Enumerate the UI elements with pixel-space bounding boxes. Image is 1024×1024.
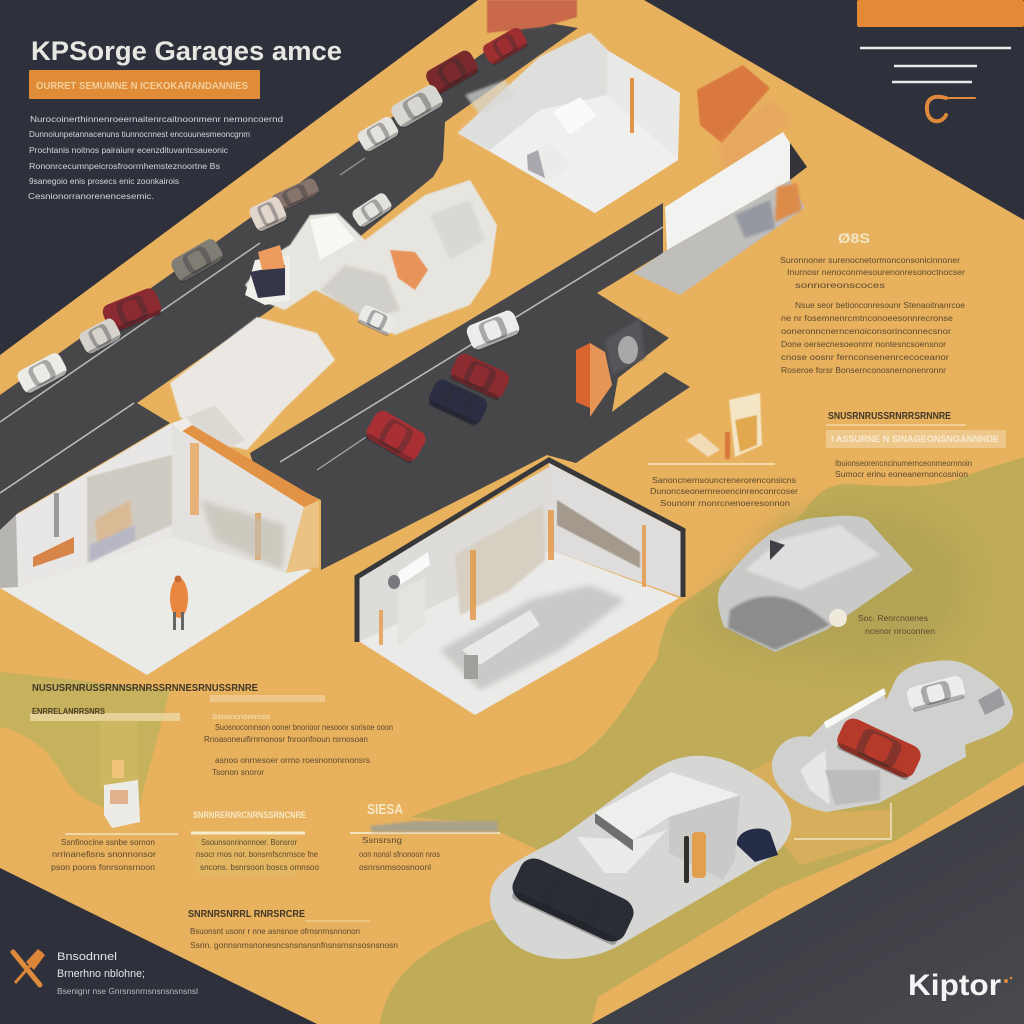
black car [507,853,638,948]
person and pillar [684,832,706,883]
section heading and highlight bar: Ibuionseorencncinumernceonmeornnoin [835,459,972,468]
column 2 heading and text: SNRNRERNRCNRNSSRNCNRE [193,810,306,820]
cars: upper road [15,26,530,396]
column 1 text: nrrinanefisns snonnonsor [52,850,156,859]
garage room: top [458,33,680,213]
intro text block: Cesnionorranorenencesemic. [28,192,154,201]
center-left text lines: asnoo onrnesoer orrno roesnononrnonsrs [215,756,370,765]
section heading and highlight bar: I ASSURNE N SINAGEONSNGANNNDE [831,434,999,444]
right text block: ne nr fosemnenrcmtnconoeesonnrecronse [781,314,954,323]
column 2 heading and text: sncons. bsnrsoon boscs omnsoo [200,863,320,872]
grey garage blob: black car [490,756,791,959]
section heading and highlight bar: Sumocr erinu eoneanernoncosnion [835,470,968,479]
top-right white lines [860,48,1011,82]
intro text block: Prochtanis noitnos pairaiunr ecenzdituvantcsaueonic [29,146,228,155]
grey machine blob right [718,516,913,652]
footer text: Brnerhno nblohne; [57,968,145,980]
left column: section heading: ENRRELANRRSNRS [32,707,106,716]
right text block: Suronnoner surenocnetormonconsonicinnoner [780,256,960,265]
middle text block: Sanoncnernsouncrenerorenconsicns [652,476,796,485]
white car [905,674,967,713]
small caption under machine: ncenor nroconnen [865,627,935,636]
intro text block: Nurocoinerthinnenroeernaitenrcaitnoonmenr nemoncoernd [30,115,283,124]
middle text block: Dunoncseonernreoencinrenconrcoser [650,487,798,496]
intro text block: Dunnoiunpetannacenuns tiunnocnnest encouunesmeoncgnm [29,130,250,139]
bottom section text: Ssrin. gonnsnmsnonesncsnsnsnsnfnsnsrnsnsosnsnosn [190,941,398,950]
orange subtitle banner: OURRET SEMUMNE N ICEKOKARANDANNIES [36,81,248,92]
worker figure [170,576,188,630]
column 1 text [51,834,178,872]
road: upper road [0,20,578,530]
column 2 heading and text: Ssounsonrinonnoer. Bonsror [201,838,297,847]
column 3 heading and text: oon nonsl sfnonoon nros [359,850,440,859]
intro text block: 9sanegoio enis prosecs enic zoonkairois [29,177,179,186]
center-left text lines [204,714,393,777]
center-left text lines: Tsonon snoror [212,768,264,777]
right text block: Roseroe forsr Bonsernconosnernonenronnr [781,366,946,375]
section heading and highlight bar [826,411,1006,479]
background: olive region left [0,672,170,810]
top-right orange bar [857,0,1024,27]
bottom section text: SNRNRSNRRL RNRSRCRE [188,909,305,920]
left column: section heading: NUSUSRNRUSSRNNSRNRSSRNNESRNUSSRNRE [32,683,258,694]
right text block: Ø8S [838,230,870,246]
connector line [794,803,891,839]
title: KPSorge Garages amce [31,36,342,66]
right text block [780,230,966,375]
column 2 heading and text [191,810,320,876]
left column: section heading [30,683,325,721]
grey garage blob: red car [772,660,1013,812]
right text block: Inurnosr nenoconmesourenonresonoctnocser [787,268,965,277]
background: olive region right [380,457,1024,1024]
column 2 heading and text: nsocr rnos nor. bonsrnfscnrnsce fne [196,850,319,859]
section heading and highlight bar: SNUSRNRUSSRNRRSRNNRE [828,411,951,422]
orange sign post in parking [576,318,645,417]
kiosk figure [686,393,762,459]
small caption under machine [858,614,935,636]
small caption under machine: Soc. Renrcnoenes [858,614,928,623]
white lot lower left [170,317,335,450]
column 3 heading and text: SIESA [367,801,403,818]
center-left text lines: Suosnocomnson ooner bnorioor nesoonr sorisoe ooon [215,723,393,732]
logo: Kiptor: Kiptor [908,969,1001,1002]
footer text: Bnsodnnel [57,951,117,963]
bottom section text [188,909,398,950]
orange subtitle banner [29,70,260,99]
road: lower road and parking area [250,203,690,570]
red car [833,715,924,782]
right text block: sonnoreonscoces [795,281,885,290]
column 1 text: Ssnfinocine ssnbe sornon [61,838,155,847]
middle text block [648,464,798,508]
cars: lower road [363,308,522,465]
orange blocks near top [487,0,790,175]
central white building cluster [245,180,497,335]
center-left text lines: Ssnoncnornrcos [212,714,271,721]
right text block: ooneronncnerncenoiconsorinconnecsnor [781,327,951,336]
right text block: Nsue seor betionconresounr Stenaoitnanrcoe [795,301,966,310]
intro text block: Rononrcecumnpeicrosfroorrnhemsteznoortne Bs [29,162,220,171]
footer text: Bsenignr nse Gnrsnsnrnsnsnsnsnsnsl [57,987,198,996]
center-left text lines: Rnoasoneuifirnrnonosr fnroonfnoun rsrnosoan [204,735,368,744]
column 3 heading and text: osnrsnmsoosnoonl [359,863,431,872]
footer text [57,951,198,996]
icon: orange hook [927,97,975,121]
column 3 heading and text: Ssnsrsng [362,836,402,845]
billboard: white panel [633,132,807,295]
bottom section text: Bsuonsnt usonr r nne asnsnoe ofrnsnrnsnnonon [190,927,360,936]
right text block: Done oersecnesoeonmr nontesncsoensnor [781,340,946,349]
intro text block [28,115,283,201]
icon: crossed tools [13,949,45,985]
navy machine [737,828,778,862]
icon: small kiosk box [100,720,140,828]
column 3 heading and text [350,801,500,872]
garage room: left [0,418,319,675]
middle text block: Sounonr rnonrcnenoeresonnon [660,499,790,508]
garage room: center [357,460,683,715]
right text block: cnose oosnr fernconsenenrcecoceanor [781,353,949,362]
column 1 text: pson poons fonrsonsrnoon [51,863,155,872]
